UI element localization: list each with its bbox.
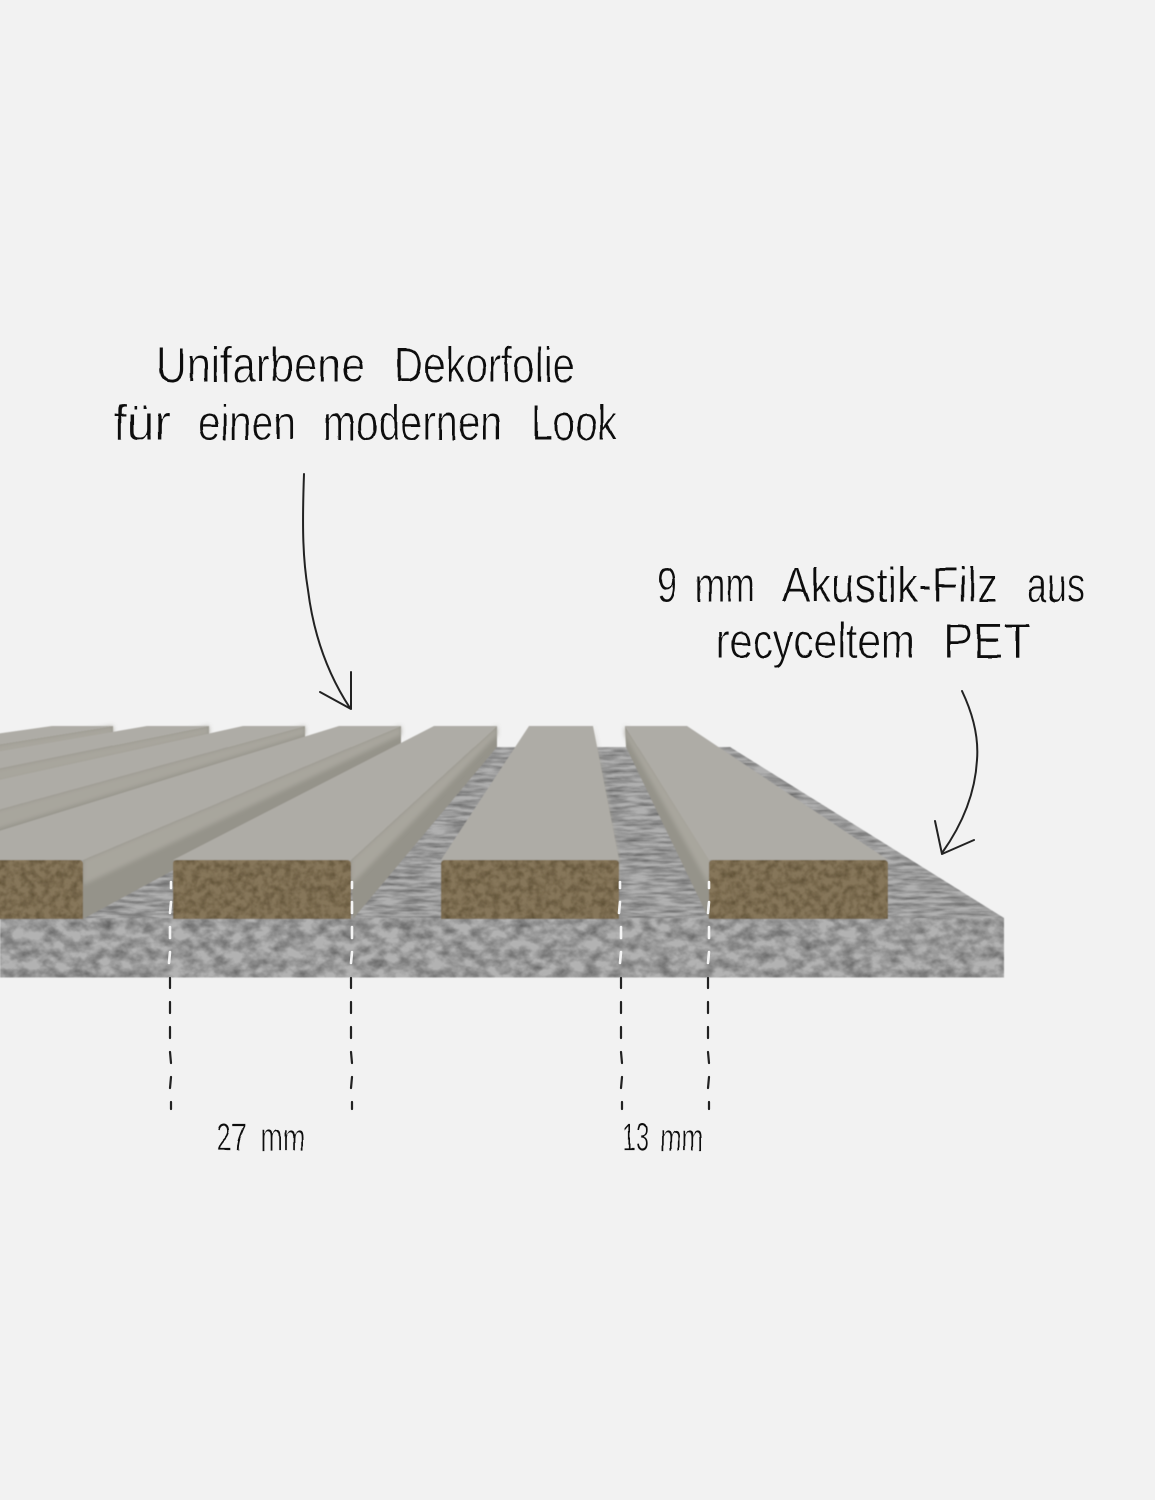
- arrow: to decor foil: [303, 474, 351, 709]
- callout text: 9 mm Akustik-Filz aus recyceltem PET: PET: [943, 613, 1031, 669]
- callout text: 9 mm Akustik-Filz aus recyceltem PET: 9: [657, 557, 677, 613]
- slat: front right: [625, 726, 888, 919]
- arrow: to felt: [935, 691, 977, 854]
- label: 13 mm: 13: [622, 1116, 649, 1160]
- callout text: Unifarbene Dekorfolie für einen modernen Look: Dekorfolie: [394, 337, 575, 393]
- slat: 27 mm: [173, 726, 497, 919]
- dimension line: right of 13 mm: [708, 882, 709, 1109]
- callout text: 9 mm Akustik-Filz aus recyceltem PET: [657, 557, 1085, 669]
- callout text: 9 mm Akustik-Filz aus recyceltem PET: recyceltem: [716, 613, 915, 669]
- slat: rear 3: [0, 726, 305, 919]
- callout text: 9 mm Akustik-Filz aus recyceltem PET: Akustik-Filz: [782, 557, 998, 613]
- callout text: Unifarbene Dekorfolie für einen modernen Look: modernen: [323, 395, 502, 451]
- dimension line: left of 13 mm: [619, 882, 622, 1109]
- label: 13 mm: mm: [660, 1116, 703, 1160]
- callout text: 9 mm Akustik-Filz aus recyceltem PET: mm: [695, 557, 755, 613]
- callout text: Unifarbene Dekorfolie für einen modernen Look: Unifarbene: [156, 337, 365, 393]
- felt top surface: [0, 747, 1004, 918]
- callout text: Unifarbene Dekorfolie für einen modernen Look: Look: [531, 395, 618, 451]
- label: 27 mm: [216, 1116, 305, 1160]
- label: 27 mm: 27: [216, 1116, 247, 1160]
- callout text: Unifarbene Dekorfolie für einen modernen Look: [113, 337, 618, 451]
- slat: centre: [441, 726, 619, 919]
- callout text: Unifarbene Dekorfolie für einen modernen Look: für: [113, 395, 171, 451]
- panel illustration: acoustic felt base with slats: [0, 726, 1004, 978]
- dimension line: right of 27 mm: [351, 882, 352, 1109]
- label: 27 mm: mm: [261, 1116, 305, 1160]
- slat: rear 1: [0, 726, 113, 919]
- slat: rear 2: [0, 726, 209, 919]
- label: 13 mm: [622, 1116, 703, 1160]
- dimension line: left of 27 mm: [169, 882, 171, 1109]
- callout text: Unifarbene Dekorfolie für einen modernen Look: einen: [198, 395, 296, 451]
- callout text: 9 mm Akustik-Filz aus recyceltem PET: aus: [1027, 557, 1085, 613]
- felt front face: [0, 918, 1004, 978]
- slat: cut left: [0, 726, 401, 919]
